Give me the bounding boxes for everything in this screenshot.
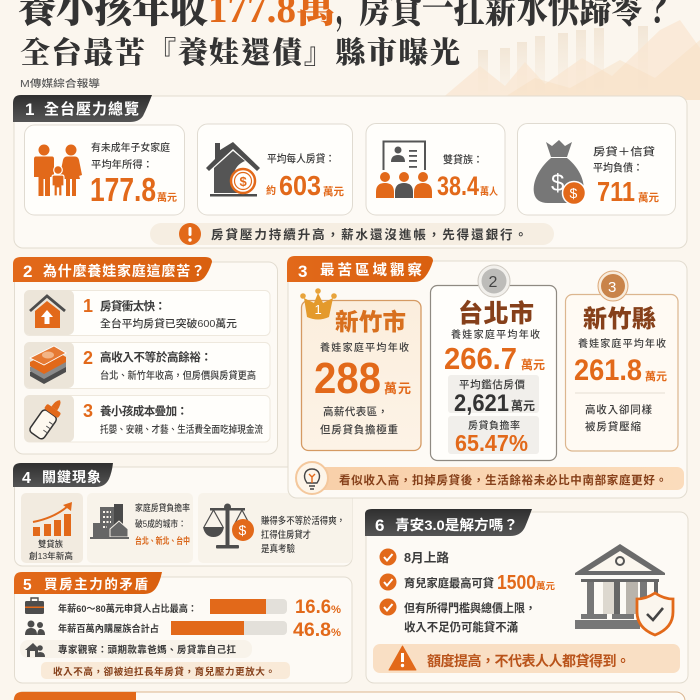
cell: double loan record — [21, 493, 83, 563]
card: income — [24, 125, 184, 215]
source line: M傳媒綜合報導 — [20, 77, 100, 90]
callout: rising pressure — [150, 223, 554, 245]
row: 60-80 applicants: % — [331, 604, 341, 616]
card: Hsinchu County: 261.8 — [574, 354, 642, 387]
header 5: 5 — [23, 577, 32, 594]
callout: rising pressure: 房貸壓力持續升高，薪水還沒進帳，先得還銀行。 — [211, 227, 527, 242]
card: income: 有未成年子女家庭 — [91, 141, 170, 154]
item: 15 million limit: 萬元 — [536, 580, 555, 591]
badge 2: 2 — [488, 274, 498, 291]
card: mortgage per person: 平均每人房貸： — [267, 152, 335, 165]
icon: house arrow — [30, 296, 65, 328]
icon: people and ID board — [376, 142, 432, 198]
card: double loan — [366, 124, 505, 215]
callout: amplified pressure: 收入不高，卻被迫扛長年房貸，育兒壓力更放大。 — [53, 666, 275, 678]
card: Hsinchu County — [566, 271, 678, 451]
row: 60-80 applicants: 年薪60～80萬元申貸人占比最高： — [58, 603, 197, 615]
callout: amplified pressure — [41, 662, 290, 679]
card: Hsinchu City: 但房貸負擔極重 — [320, 423, 398, 436]
icon: baby bottle — [28, 395, 67, 440]
header 2: 為什麼養娃家庭這麼苦？ — [43, 263, 205, 279]
card: Taipei City: 萬元 — [511, 399, 535, 413]
icon: crown: 1 — [314, 302, 322, 317]
header 4 — [13, 463, 113, 487]
icon: rising bars — [33, 502, 72, 536]
header 1: 全台壓力總覽 — [44, 100, 139, 118]
icon: money bag: $ — [570, 185, 578, 201]
icon: buildings — [90, 504, 129, 539]
icon: house with coin: $ — [240, 174, 248, 189]
title — [18, 0, 674, 33]
card: Hsinchu City: 高薪代表區， — [323, 405, 388, 418]
row: 60-80 applicants: 16.6 — [295, 597, 331, 618]
card: total debt: 房貸＋信貸 — [593, 145, 655, 158]
row: reason 2: 台北、新竹年收高，但房價與房貸更高 — [100, 369, 256, 382]
row: under one million buyers: % — [331, 627, 341, 639]
card: income: 萬元 — [157, 191, 177, 204]
icon: balance scale: $ — [238, 522, 246, 538]
badge 3: 3 — [608, 279, 616, 296]
card: total debt: 711 — [597, 176, 635, 207]
card: mortgage per person — [198, 124, 352, 215]
header 6: 6 — [375, 516, 384, 535]
row: 60-80 applicants — [25, 597, 341, 618]
card: Hsinchu City — [300, 288, 421, 450]
row: expert observation: 專家觀察：頭期款靠爸媽、房貸靠自己扛 — [58, 644, 236, 656]
row: reason 3 — [24, 395, 270, 442]
cell: cities over 50% — [87, 493, 193, 563]
card: double loan: 雙貸族： — [443, 153, 483, 166]
card: Taipei City: 266.7 — [444, 341, 517, 376]
row: under one million buyers — [25, 620, 341, 641]
icon: cash stack — [30, 346, 66, 384]
panel 6: youth loan — [365, 509, 688, 683]
card: Taipei City: 養娃家庭平均年收 — [451, 328, 540, 341]
item: August — [380, 548, 450, 566]
row: under one million buyers: 46.8 — [293, 620, 331, 641]
panel 1: overview — [13, 95, 687, 248]
card: income: 平均年所得： — [91, 158, 153, 171]
panel 4: key phenomena — [13, 463, 352, 566]
cell: cities over 50%: 破5成的城市： — [135, 518, 186, 529]
row: reason 2: 高收入不等於高餘裕： — [100, 350, 212, 364]
callout: warning: 額度提高，不代表人人都貸得到。 — [427, 653, 630, 669]
icon: briefcase — [25, 598, 44, 614]
row: reason 1 — [24, 290, 270, 336]
header 1 — [13, 95, 152, 122]
badge 3 — [598, 271, 628, 301]
card: mortgage per person: 603 — [279, 170, 321, 201]
cell: earn more: 扛得住房貸才 — [261, 529, 311, 541]
callout: warning — [373, 644, 680, 673]
cell: double loan record: 創13年新高 — [29, 551, 73, 561]
header 5: 買房主力的矛盾 — [44, 576, 148, 592]
subtitle: 全台最苦『養娃還債』縣市曝光 — [20, 36, 460, 70]
header 2: 2 — [23, 262, 32, 281]
card: double loan: 38.4 — [437, 171, 479, 201]
card: Hsinchu City: 養娃家庭平均年收 — [320, 341, 409, 354]
row: reason 2: 2 — [83, 348, 93, 368]
header 3: 3 — [298, 262, 307, 281]
card: total debt — [518, 124, 676, 215]
icon: house and person — [25, 643, 45, 657]
header 3: 最苦區域觀察 — [320, 261, 422, 279]
card: Hsinchu City: 288 — [314, 354, 381, 403]
cell: cities over 50%: 台北、新北、台中 — [135, 535, 190, 546]
item: income thresholds: 但有所得門檻與總價上限， — [404, 601, 536, 615]
panel 5: home buyers contradiction — [14, 572, 352, 683]
item: 15 million limit — [380, 572, 555, 594]
item: 15 million limit: 育兒家庭最高可貸 — [404, 576, 494, 590]
card: Hsinchu County: 高收入卻同樣 — [585, 403, 652, 416]
row: expert observation — [20, 640, 252, 658]
card: total debt: 萬元 — [638, 191, 659, 204]
card: Hsinchu City: 萬元 — [384, 381, 411, 396]
card: income: 177.8 — [90, 171, 156, 208]
card: Hsinchu County: 養娃家庭平均年收 — [578, 337, 666, 350]
badge 2 — [478, 265, 510, 297]
card: Taipei City: 2,621 — [454, 390, 509, 417]
icon: money bag: $ — [551, 170, 564, 197]
item: income thresholds: 收入不足仍可能貸不滿 — [404, 620, 518, 634]
item: income thresholds — [380, 598, 536, 634]
item: August: 8月上路 — [404, 550, 450, 565]
card: Taipei City: 房貸負擔率 — [468, 419, 520, 432]
cell: double loan record: 雙貸族 — [38, 539, 63, 549]
card: Hsinchu County: 被房貸壓縮 — [585, 420, 641, 433]
card: total debt: 平均負債： — [593, 161, 643, 174]
card: Taipei City — [430, 265, 556, 460]
card: Taipei City: 萬元 — [521, 358, 545, 372]
row: reason 3: 養小孩成本疊加： — [100, 404, 188, 418]
item: 15 million limit: 1500 — [497, 572, 536, 594]
header 5 — [14, 572, 162, 594]
header 2 — [13, 257, 212, 282]
icon: house with coin — [206, 142, 260, 196]
cell: earn more: 賺得多不等於活得爽， — [261, 515, 345, 527]
row: reason 1: 房貸衝太快： — [100, 299, 166, 313]
header 6 — [365, 509, 532, 536]
background mountain chart motif — [440, 20, 700, 100]
icon: family — [34, 144, 82, 196]
cell: earn more — [198, 493, 352, 563]
card: double loan: 萬人 — [480, 185, 498, 198]
callout: after mortgage: 看似收入高，扣掉房貸後，生活餘裕未必比中南部家庭更好。 — [339, 473, 667, 487]
row: under one million buyers: 年薪百萬內購屋族合計占 — [58, 623, 159, 635]
header 4: 4 — [22, 470, 31, 487]
card: Hsinchu County: 萬元 — [645, 370, 667, 383]
card: mortgage per person: 萬元 — [323, 185, 344, 198]
row: reason 1: 1 — [83, 296, 93, 316]
card: mortgage per person: 約 — [266, 184, 276, 197]
row: reason 3: 3 — [83, 401, 93, 421]
icon: light bulb — [305, 469, 319, 489]
card: Hsinchu City: 新竹市 — [335, 308, 406, 335]
panel 2: why — [13, 257, 278, 454]
card: Taipei City: 台北市 — [458, 299, 534, 328]
header 6: 青安3.0是解方嗎？ — [395, 517, 518, 533]
card: Hsinchu County: 新竹縣 — [583, 305, 656, 333]
cell: earn more: 是真考驗 — [261, 543, 295, 555]
panel 7: bottom cut-off section — [14, 692, 685, 700]
panel 3: worst regions — [287, 256, 687, 498]
row: reason 1: 全台平均房貸已突破600萬元 — [100, 317, 238, 330]
callout: after mortgage — [296, 462, 684, 494]
card: Taipei City: 65.47% — [455, 430, 528, 456]
row: reason 3: 托嬰、安親、才藝、生活費全面吃掉現金流 — [100, 423, 263, 436]
icon: bank with shield — [575, 544, 673, 635]
icon: balance scale — [203, 504, 254, 548]
card: Taipei City: 平均鑑估房價 — [459, 378, 526, 391]
header 1: 1 — [25, 100, 34, 119]
header 3 — [287, 256, 433, 282]
icon: crown — [300, 288, 337, 320]
row: reason 2 — [24, 342, 270, 388]
icon: money bag — [534, 140, 586, 204]
cell: cities over 50%: 家庭房貸負擔率 — [135, 502, 190, 513]
icon: people — [25, 620, 45, 635]
header 4: 關鍵現象 — [42, 469, 101, 485]
